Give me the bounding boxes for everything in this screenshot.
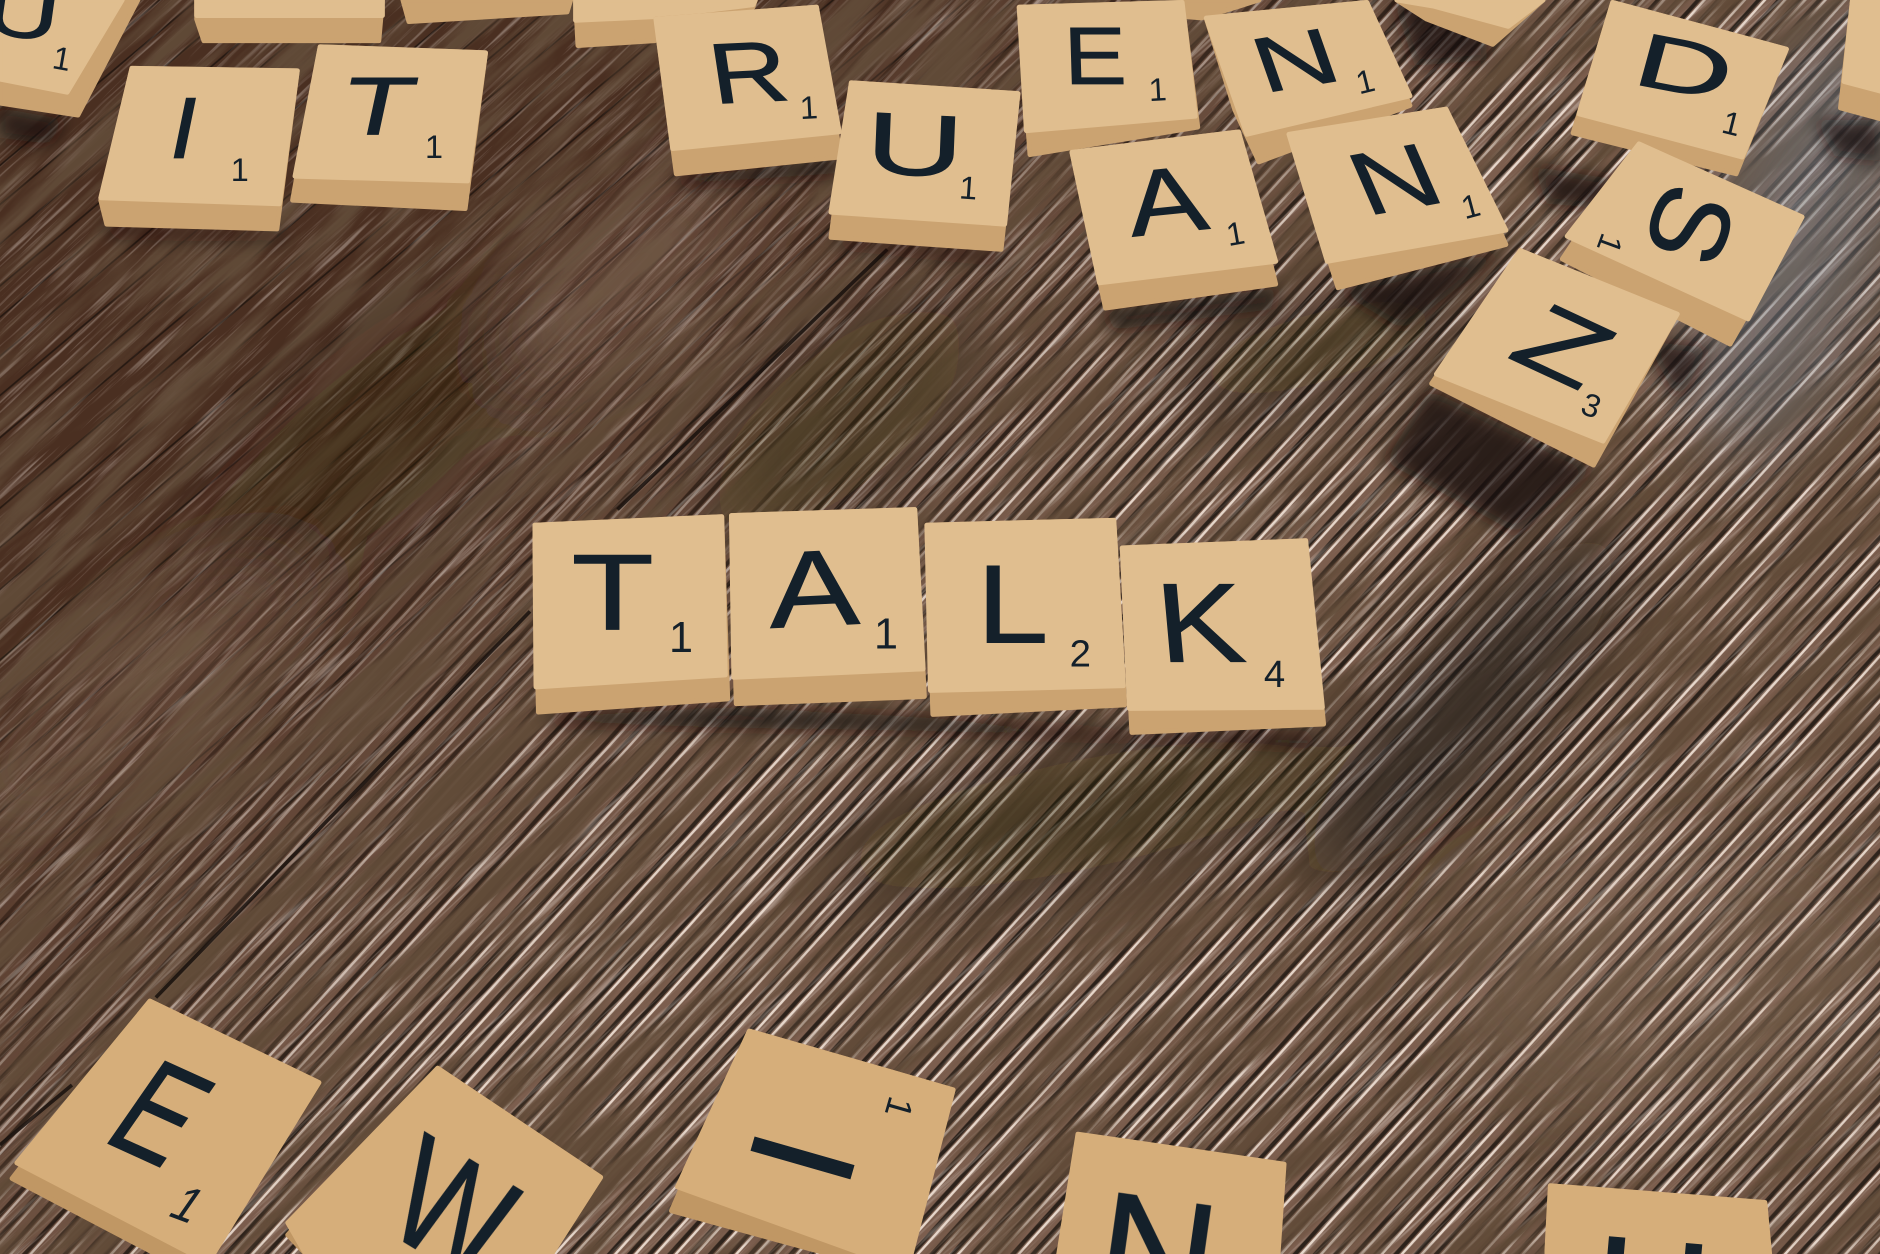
tile: A: A xyxy=(1117,146,1214,256)
tile: T xyxy=(535,517,728,712)
tile: U xyxy=(831,83,1018,249)
tile: S: S xyxy=(1619,169,1760,281)
tile: K xyxy=(1122,541,1324,732)
tile: I: 1 xyxy=(231,152,249,188)
tile fragment: top right xyxy=(1397,0,1543,44)
tile: L: L xyxy=(977,542,1049,667)
tile: I xyxy=(101,68,297,229)
tile fragment: top edge behind R xyxy=(576,0,755,46)
tile: U: U xyxy=(864,94,966,197)
tile: N lower: 1 xyxy=(1457,187,1484,226)
tile: L xyxy=(927,520,1125,715)
table seam line xyxy=(0,249,887,1145)
tile: N upper: N xyxy=(1240,11,1350,109)
tile: K: K xyxy=(1151,559,1250,686)
tile: U: 1 xyxy=(958,169,979,207)
tile: I bottom: 1 xyxy=(877,1092,922,1123)
tile fragment: top left U xyxy=(0,0,138,115)
tile: K: 4 xyxy=(1264,653,1285,696)
tile: A xyxy=(1072,132,1276,308)
tile fragment: top edge middle xyxy=(403,0,571,22)
tile: D: D xyxy=(1625,17,1743,118)
tile: N upper xyxy=(1206,2,1410,162)
tile: Z: 3 xyxy=(1577,386,1606,426)
tile: N upper: 1 xyxy=(1352,62,1378,101)
tile: N lower: N xyxy=(1333,125,1457,235)
tile shadows xyxy=(0,0,1880,748)
tile: N lower xyxy=(1289,109,1506,288)
tile: E bottom left: E xyxy=(81,1032,239,1195)
tile: A xyxy=(731,510,924,704)
tile: A: A xyxy=(765,526,862,651)
word: TALK xyxy=(535,510,1324,732)
tile: Z xyxy=(1432,251,1677,465)
tile fragment: right edge xyxy=(1840,0,1880,119)
tile: T xyxy=(293,47,486,209)
tile: E: 1 xyxy=(1148,71,1168,108)
tile: T: T xyxy=(334,60,424,152)
tile: E: E xyxy=(1062,10,1128,102)
tile: R: R xyxy=(702,22,795,122)
tile: W bottom xyxy=(288,1068,601,1254)
tile: N bottom xyxy=(1059,1134,1284,1254)
tile: D xyxy=(1573,2,1786,174)
tile: I: I xyxy=(161,80,208,177)
tile: L: 2 xyxy=(1070,633,1091,676)
tile: R: 1 xyxy=(799,89,819,126)
tile: A: 1 xyxy=(1223,214,1247,253)
tile: T: 1 xyxy=(669,614,693,662)
tile: E bottom left xyxy=(12,1001,319,1254)
tile: fragment bottom right xyxy=(1547,1186,1770,1254)
tile: S xyxy=(1562,144,1802,344)
tile: R xyxy=(656,7,840,174)
tile: A: 1 xyxy=(874,611,898,659)
tile: S: 1 xyxy=(1590,229,1630,258)
tile: Z: Z xyxy=(1492,283,1636,409)
tile: E xyxy=(1019,2,1198,155)
tile: T: T xyxy=(571,531,654,652)
tile fragment: behind E xyxy=(1185,0,1259,18)
tile: D: 1 xyxy=(1719,104,1745,143)
tile: I bottom xyxy=(671,1031,953,1254)
tile fragment: top left U: 1 xyxy=(50,39,74,78)
tile: I bottom: I xyxy=(716,1115,889,1201)
tile: T: 1 xyxy=(425,129,443,165)
tile: E bottom left: 1 xyxy=(159,1177,216,1233)
tile fragment: top edge xyxy=(197,0,382,41)
